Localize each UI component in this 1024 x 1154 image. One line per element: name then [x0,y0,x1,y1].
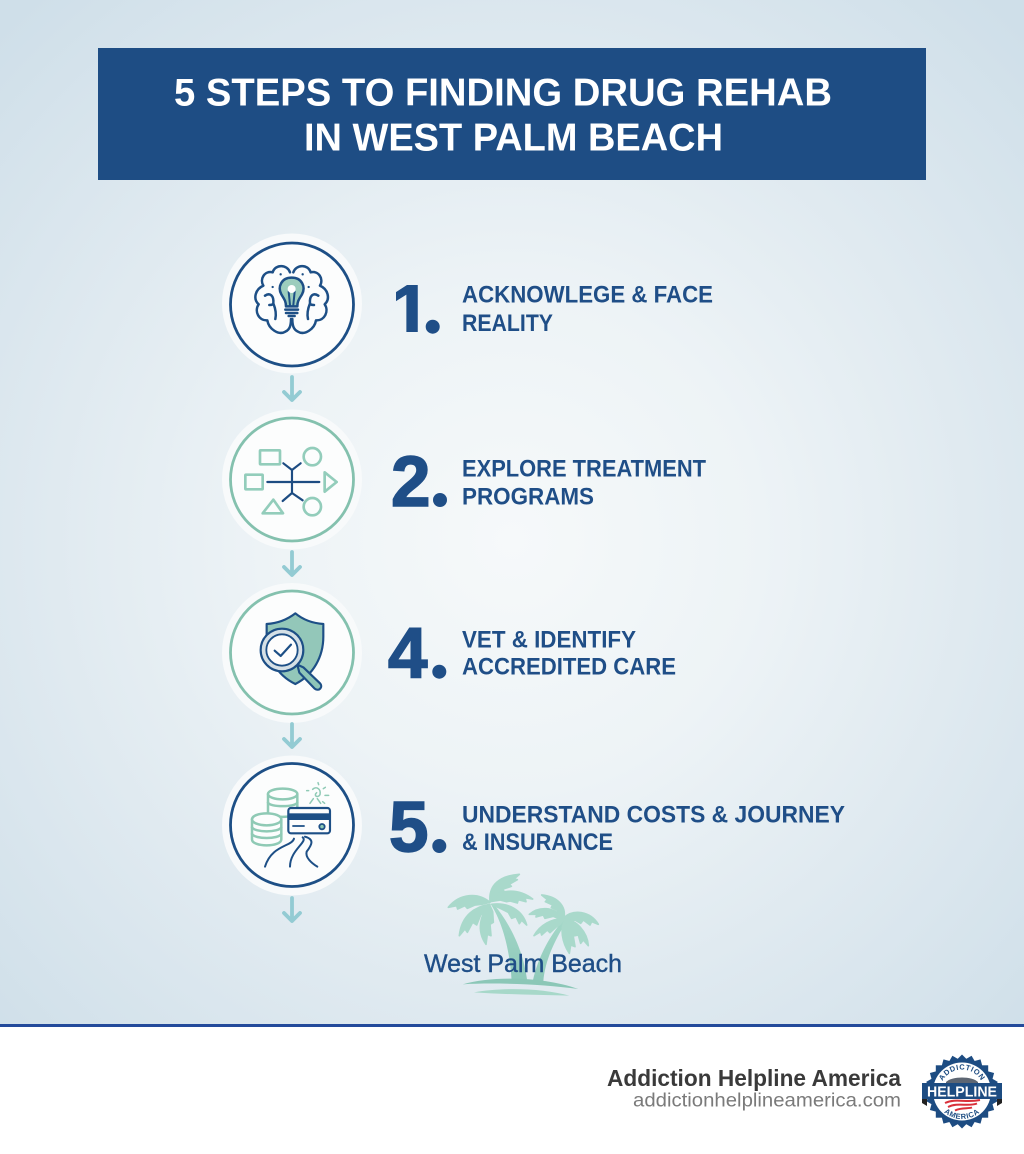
number 5: . [438,843,440,849]
step 5 label: & INSURANCE [462,829,613,856]
step 2 label: EXPLORE TREATMENT [462,456,706,483]
number 4 [388,614,446,694]
logo badge [922,1054,1002,1128]
title banner: 5 STEPS TO FINDING DRUG REHAB [174,72,832,115]
arrow 4 [284,898,300,921]
step 5 [222,756,845,896]
footer brand name: Addiction Helpline America [607,1065,901,1091]
step 2 label: PROGRAMS [462,483,594,510]
step 4 label: VET & IDENTIFY [462,626,636,653]
logo badge: HELPLINE [927,1084,997,1100]
number 4: . [438,669,440,675]
step 5 label: UNDERSTAND COSTS & JOURNEY [462,801,845,828]
step 2 label [462,456,706,510]
icon: brain with lightbulb [222,234,362,374]
West Palm Beach palm tree graphic [424,874,622,996]
icon: coins, card and road [222,756,362,896]
logo badge: AMERICA [944,1109,980,1120]
number 5: 5 [389,788,428,868]
number 1: 1 [387,267,433,360]
West Palm Beach palm tree graphic: West Palm Beach [424,950,622,978]
footer website: addictionhelplineamerica.com [633,1090,901,1112]
arrow 2 [284,552,300,575]
arrow 1 [284,377,300,400]
step 1 label: REALITY [462,310,553,337]
number 5 [389,788,446,868]
title banner: IN WEST PALM BEACH [304,117,723,160]
step 1 label: ACKNOWLEGE & FACE [462,282,713,309]
step 4 label [462,626,676,680]
number 1: . [431,324,433,330]
logo badge: ADDICTION [940,1064,985,1081]
step 4 label: ACCREDITED CARE [462,653,676,680]
number 2: 2 [391,443,430,522]
arrow 3 [284,724,300,747]
icon: treatment program flow diagram [222,410,362,550]
number 1 [396,285,440,334]
title banner [98,48,926,180]
step 1 [222,234,713,374]
step 1 label [462,282,713,337]
step 3 [222,583,676,723]
step 2 [222,410,706,550]
number 2: . [438,497,440,503]
icon: shield with magnifier [222,583,362,723]
step 5 label [462,801,845,856]
number 4: 4 [388,614,428,694]
footer [0,1024,1024,1154]
